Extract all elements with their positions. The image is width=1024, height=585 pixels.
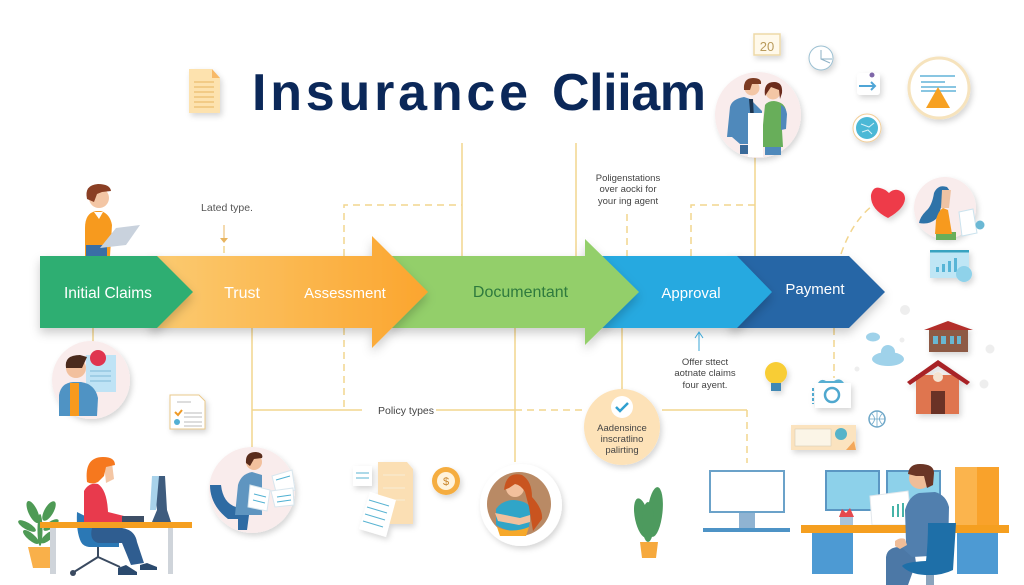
avatar: two colleagues — [715, 72, 801, 158]
annotation: offer text — [674, 332, 736, 391]
icon: dollar gear — [432, 467, 460, 495]
icon: clock — [809, 46, 833, 70]
avatar: woman with crossed arms — [480, 464, 562, 546]
icon: calendar — [754, 34, 780, 55]
annotation: offer text: four ayent. — [683, 380, 727, 391]
circle callout: assessment — [584, 389, 660, 465]
icon: dollar gear: $ — [443, 476, 449, 488]
icon: calendar: 20 — [760, 39, 774, 54]
icon: camera — [813, 379, 851, 408]
step: payment — [730, 256, 885, 328]
annotation: latest type — [201, 202, 253, 243]
plant — [17, 499, 60, 568]
icon: brown house — [924, 321, 973, 352]
connector lines — [93, 143, 872, 463]
step: approval: Approval — [661, 285, 721, 302]
icon: clouds — [866, 332, 904, 366]
title — [252, 64, 706, 122]
title: Insurance — [252, 64, 528, 122]
annotation: top text: Poligenstations — [596, 173, 660, 184]
step: payment: Payment — [785, 281, 845, 298]
illustration: monitor — [703, 471, 790, 532]
annotation: offer text: Offer sttect — [682, 357, 728, 368]
step: approval — [600, 256, 772, 328]
icon: calendar card — [791, 425, 856, 450]
icon group: policy papers — [353, 462, 413, 537]
step: initial claims: Initial Claims — [64, 285, 152, 302]
small gear dots — [854, 305, 994, 388]
person on arrow with tablet — [85, 184, 140, 256]
icon: globe — [869, 411, 885, 427]
label: policy types: Policy types — [378, 405, 434, 417]
annotation: top text — [596, 173, 660, 207]
step: trust and assessment: Trust — [224, 285, 260, 302]
illustration: man at desk — [801, 464, 1009, 585]
plant — [631, 486, 665, 558]
step: trust and assessment — [150, 236, 428, 348]
decorative clouds and houses — [765, 305, 994, 450]
title: Cliiam — [552, 64, 706, 122]
icon: checklist — [170, 395, 205, 429]
illustration: woman at desk — [17, 457, 192, 576]
step: trust and assessment: Assessment — [304, 285, 387, 302]
step: documentant — [390, 239, 639, 345]
avatar: woman with document — [914, 177, 984, 240]
step: initial claims — [40, 256, 193, 328]
circle callout: assessment: palirting — [605, 445, 639, 456]
icon: arrows tile — [857, 72, 880, 95]
circle callout: assessment: inscratlino — [601, 434, 643, 445]
annotation: offer text: aotnate claims — [674, 368, 736, 379]
icon: chart tile with hand — [930, 250, 972, 282]
icon: warning badge — [909, 58, 969, 118]
icon: heart — [871, 188, 905, 218]
avatar: man in chair with papers — [209, 447, 295, 533]
circle callout: assessment: Aadensince — [597, 423, 647, 434]
process arrow band — [40, 236, 885, 348]
title icon: document — [189, 69, 220, 113]
annotation: top text: over aocki for — [599, 184, 657, 195]
step: documentant: Documentant — [473, 284, 569, 301]
icon: red house — [907, 360, 970, 414]
avatar: man with document — [52, 341, 130, 419]
annotation: latest type: Lated type. — [201, 202, 253, 214]
icon: lightbulb — [765, 362, 787, 391]
annotation: top text: your ing agent — [598, 196, 658, 207]
icon: globe badge — [853, 114, 881, 142]
